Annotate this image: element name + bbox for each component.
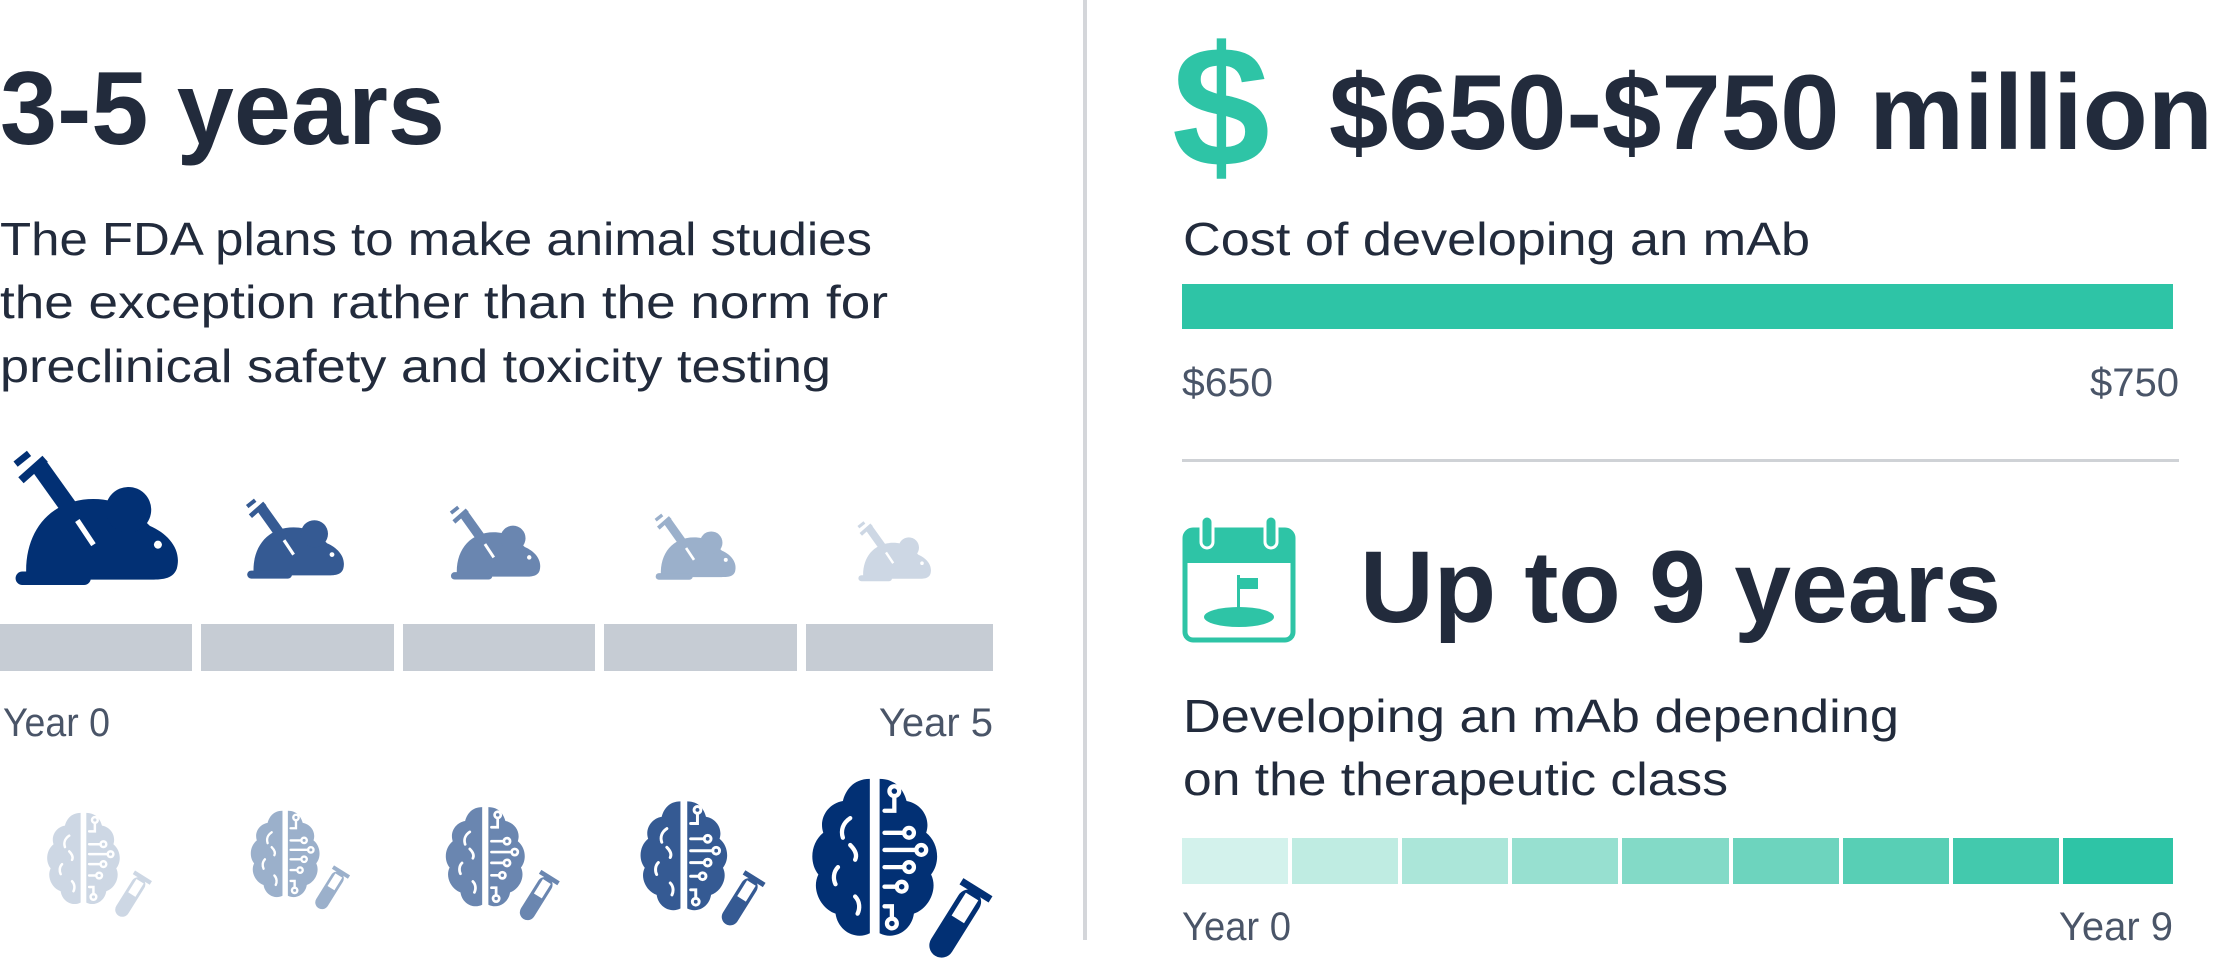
label: $750: $750 <box>2090 361 2179 405</box>
bar: cost range <box>1182 284 2173 329</box>
divider: vertical <box>1083 0 1087 940</box>
text block: FDA plans: preclinical safety and toxicity testing <box>0 340 831 392</box>
icon: calendar with flag <box>1185 516 1293 640</box>
text: cost of developing: Cost of developing an mAb <box>1183 213 1810 265</box>
label: Year 0 right: Year 0 <box>1182 905 1291 949</box>
title: Up to 9 years: Up to 9 years <box>1360 530 2001 644</box>
label: Year 0: Year 0 <box>3 701 110 745</box>
text: developing depending on class: Developing an mAb depending <box>1183 690 1899 742</box>
label: Year 5: Year 5 <box>879 701 993 745</box>
title: $650-$750 million: $650-$750 million <box>1329 52 2213 172</box>
label: Year 9: Year 9 <box>2059 905 2173 949</box>
divider: horizontal <box>1182 459 2179 462</box>
text: developing depending on class <box>1183 690 1899 805</box>
text: developing depending on class: on the therapeutic class <box>1183 753 1728 805</box>
text block: FDA plans: The FDA plans to make animal studies <box>0 213 872 265</box>
timeline bar: 5 years <box>0 624 993 671</box>
icons: brains with test tubes <box>47 779 992 963</box>
title: 3-5 years: 3-5 years <box>0 51 445 167</box>
icons: mice with syringes <box>16 453 931 585</box>
text block: FDA plans: the exception rather than the norm for <box>0 276 888 328</box>
icon: dollar sign: $ <box>1172 11 1270 203</box>
label: $650: $650 <box>1182 361 1273 405</box>
text block: FDA plans <box>0 213 888 392</box>
timeline bar: 9 years gradient <box>1182 838 2173 884</box>
